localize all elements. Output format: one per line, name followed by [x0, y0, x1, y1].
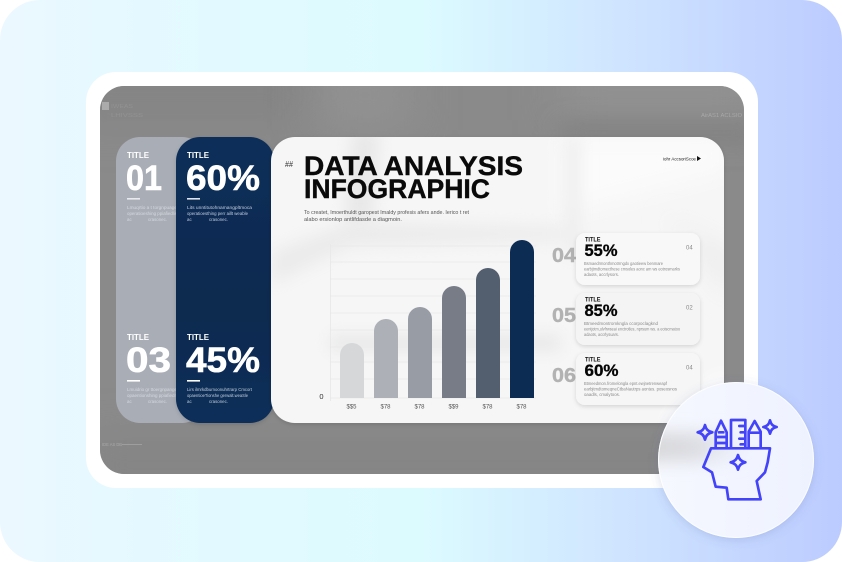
axis labels: $78 [482, 404, 493, 410]
icon: head with pencils and ruler [698, 420, 777, 499]
icon: pencil [749, 421, 761, 447]
card 01: TITLE [127, 150, 149, 160]
stat card 85%: 85% [584, 301, 618, 320]
card 45%: ac [187, 399, 192, 404]
hash mark: ## [285, 160, 293, 169]
card 60%: TITLE [187, 150, 209, 160]
stat card 55%: Bsmaedrmonthmotrrngdx gaotieew benmare [584, 261, 664, 266]
side numbers: 06 [552, 365, 576, 387]
stat card 55%: 55% [584, 241, 618, 260]
card 60% [186, 150, 260, 222]
card 01: 01 [126, 159, 162, 198]
stat card 55%: adaots, accrlysors. [584, 272, 619, 277]
axis labels: $78 [516, 404, 527, 410]
card 45%: TITLE [187, 332, 209, 342]
icon: brush [716, 421, 727, 447]
icon: sparkle centre [731, 455, 745, 470]
title: INFOGRAPHIC [304, 174, 490, 204]
card 01: operatioeshing ppiafiedlis [127, 211, 178, 216]
stat card 55%: earbjtmdtomecthese cmsoles aonc am ws eotrosmarks [584, 266, 680, 272]
side numbers [552, 245, 577, 387]
bar chart [319, 240, 536, 410]
card 45% [186, 332, 260, 404]
title [304, 151, 523, 204]
axis labels: 0 [319, 392, 324, 401]
stat card 60% [576, 353, 700, 405]
card 01 [126, 150, 178, 222]
faint top left caption: IWEAS [111, 104, 134, 110]
axis labels: $$9 [448, 404, 459, 410]
icon: sparkle right [763, 420, 777, 434]
axis labels: $78 [380, 404, 391, 410]
axis labels: $$5 [346, 404, 357, 410]
stat card 55%: TITLE [585, 236, 600, 244]
card 03: crasonec. [148, 399, 167, 404]
stat card 85%: TITLE [585, 296, 600, 304]
small square mark [102, 102, 109, 110]
card 01: ac [127, 217, 132, 222]
faint top left caption [112, 104, 142, 117]
stat card 85% [576, 293, 700, 345]
top right note: iohr AccsoriScoe [663, 156, 696, 162]
stat card 60%: earbjtmdtomeqneCtbaNautrps aontes. poseosnos [584, 386, 677, 392]
stat card 85%: 02 [686, 306, 693, 312]
subtitle: alabo ersionlop antlifdasde a diagmoin. [304, 217, 402, 223]
icon: head outline [703, 448, 770, 499]
stat card 60%: oaadls, cmalytoos. [584, 392, 620, 397]
slide photo backdrop [100, 86, 744, 474]
card 60%: crasonec. [209, 217, 228, 222]
card 03: TITLE [127, 332, 149, 342]
card 45%: crasonec. [209, 399, 228, 404]
stat card 60%: TITLE [585, 356, 600, 364]
card 60%: ac [187, 217, 192, 222]
panel: main white panel [271, 130, 730, 423]
card 45%: Lirs ilmrkdburnoonuhrtrarp Cmcort [187, 387, 253, 392]
faint bottom left caption [102, 443, 142, 446]
subtitle [304, 210, 469, 223]
card 03: opaentionshing ppiafiedn [127, 393, 178, 398]
icon: ruler [731, 420, 745, 447]
card 01: crasonec. [148, 217, 167, 222]
stat card 85%: adaots, accrlysuars. [584, 332, 619, 337]
subtitle: To createt, Imoerthuldt garopest Imaldy profesis afers ande. Ierico t ret [304, 210, 469, 216]
side numbers: 05 [552, 305, 576, 327]
faint top right caption: AirAS1 ACLSIO [701, 113, 742, 119]
card 60%: operatioesthing perr aillt weable [187, 211, 249, 216]
bars [340, 240, 534, 398]
stat card 85%: Btmeedmontromkngla ccorpoclagknd [584, 321, 659, 326]
icon: sparkle left [698, 425, 712, 440]
card 45%: 45% [186, 341, 260, 380]
title: DATA ANALYSIS [304, 151, 523, 181]
side numbers: 04 [552, 245, 577, 267]
axis labels [319, 392, 527, 410]
white frame [86, 72, 758, 488]
card 03: ac [127, 399, 132, 404]
axis labels: $78 [414, 404, 425, 410]
card 03 [126, 332, 178, 404]
stat card 55% [576, 233, 700, 285]
stat card 55%: 04 [686, 246, 693, 252]
stat card 60%: 04 [686, 366, 693, 372]
card 60%: 60% [186, 159, 260, 198]
card 01: Lmuqrtio a t torgnpuage [127, 205, 178, 210]
faint top left caption: LHIVSSS [111, 113, 144, 119]
card 45%: opaentioeTionshe gerwalt.weaSle [187, 393, 249, 398]
panel: grey cards column [116, 137, 206, 423]
badge: frosted circle [630, 382, 814, 538]
faint bottom left caption: IDE AS DB [102, 442, 122, 447]
stat card 60%: Btmeedmon.fromelongla epnt.ewjnetrenweapf [584, 381, 668, 386]
panel: navy cards column [176, 137, 274, 423]
card 60%: Lits unntitutohnamangpltmoca [187, 205, 253, 210]
card 03: 03 [126, 341, 171, 380]
card 03: Lmuidrio gr ttoergnpange [127, 387, 178, 392]
stat card 60%: 60% [584, 361, 618, 380]
stat card 85%: eentjotm,ulvfrwseai enctrotles, nprsum ws. a eoiscmatoo [584, 326, 681, 332]
